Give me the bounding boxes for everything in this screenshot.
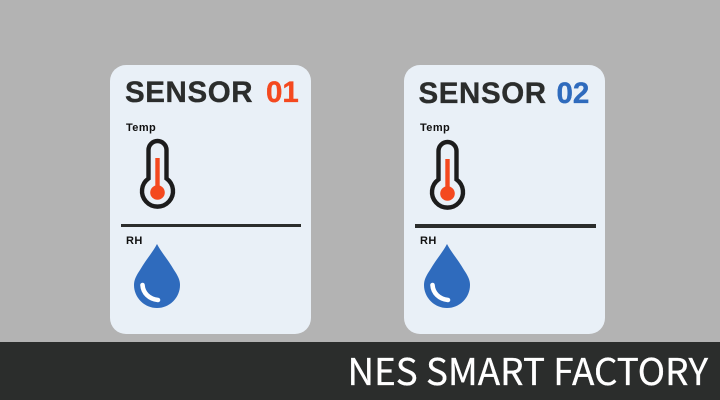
icon: water drop: [424, 244, 470, 308]
label: temp: Temp: [420, 122, 450, 134]
heading: sensor 01: SENSOR: [125, 76, 253, 109]
panel: sensor 01: [110, 65, 311, 334]
sensor number 02: 02: [556, 77, 589, 110]
label: temp: Temp: [126, 122, 156, 134]
icon: water drop: [134, 244, 180, 308]
divider line: [120, 224, 301, 227]
label: RH: RH: [126, 234, 143, 246]
divider line: [415, 224, 596, 228]
sensor number 01: 01: [266, 76, 299, 109]
heading: sensor 02: SENSOR: [418, 77, 547, 110]
icon: thermometer: [430, 140, 466, 210]
icon: thermometer: [140, 138, 176, 209]
footer title: NES SMART FACTORY: [348, 342, 708, 396]
panel: sensor 02: [404, 65, 605, 334]
label: RH: RH: [420, 234, 437, 246]
footer bar: [0, 342, 720, 400]
